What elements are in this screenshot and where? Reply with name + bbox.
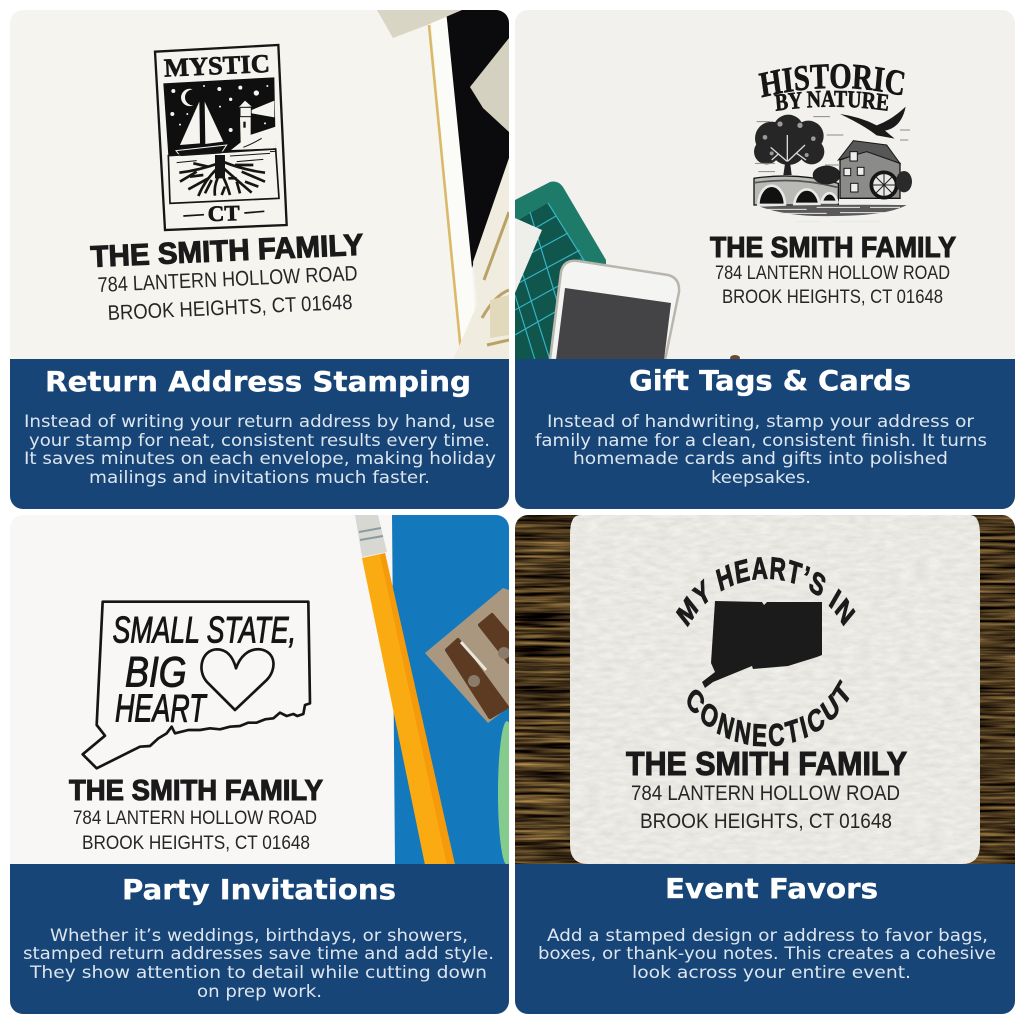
shrub <box>896 171 912 192</box>
city: BROOK HEIGHTS, CT 01648 <box>107 291 353 325</box>
city: BROOK HEIGHTS, CT 01648 <box>640 810 892 833</box>
caption panel <box>515 359 1015 509</box>
emblem word: CT: CT <box>207 200 240 226</box>
stone bridge <box>754 176 838 205</box>
body text: mailings and invitations much faster. <box>89 468 430 488</box>
body text <box>24 412 496 488</box>
heading: Event Favors <box>665 872 878 905</box>
photo: paper coaster on wood <box>515 515 1015 865</box>
family name: THE SMITH FAMILY <box>69 775 323 807</box>
body text: look across your entire event. <box>632 963 911 983</box>
Connecticut outline <box>83 602 310 768</box>
arched text: Connecticut: CONNECTICUT <box>687 679 850 747</box>
body text: keepsakes. <box>711 468 811 488</box>
eagle <box>840 107 906 139</box>
street: 784 LANTERN HOLLOW ROAD <box>715 263 950 284</box>
stamp: address block <box>710 232 956 308</box>
panel: gift tags and cards <box>515 10 1015 509</box>
body text: Add a stamped design or address to favor bags, <box>547 926 988 946</box>
body text <box>23 926 494 1002</box>
stamp: Mystic CT emblem <box>155 45 287 230</box>
caption panel <box>10 359 509 509</box>
bush <box>813 166 841 184</box>
night sky scene <box>163 77 276 157</box>
family name: THE SMITH FAMILY <box>710 232 956 264</box>
lettering: Big: BIG <box>125 649 187 697</box>
city: BROOK HEIGHTS, CT 01648 <box>722 287 943 308</box>
body text: Instead of writing your return address by hand, use <box>24 412 495 432</box>
Connecticut silhouette <box>702 601 822 688</box>
body text: stamped return addresses save time and add style. <box>23 944 494 964</box>
stamp: My Heart's in Connecticut emblem <box>676 556 856 747</box>
photo: paper, pencil and sharpener <box>10 515 516 865</box>
stamp: Small State, Big Heart emblem <box>83 602 310 768</box>
panel: party invitations <box>10 515 516 1014</box>
photo: envelope and ribbon <box>10 10 509 360</box>
water mill <box>838 141 900 198</box>
body text: Instead of handwriting, stamp your address or <box>547 412 974 432</box>
lettering: Small State: SMALL STATE, <box>113 609 296 651</box>
city: BROOK HEIGHTS, CT 01648 <box>82 833 310 854</box>
emblem word: Mystic: MYSTIC <box>163 49 270 83</box>
body text: on prep work. <box>197 982 322 1002</box>
family name: THE SMITH FAMILY <box>626 745 907 782</box>
body text <box>535 412 987 488</box>
body text: homemade cards and gifts into polished <box>573 449 948 469</box>
street: 784 LANTERN HOLLOW ROAD <box>631 782 900 805</box>
heading: Party Invitations <box>122 873 396 906</box>
water box with roots <box>168 149 279 203</box>
stamp: address block <box>626 745 907 833</box>
heart <box>201 649 273 710</box>
tree <box>754 115 824 175</box>
caption panel <box>10 864 509 1014</box>
panel: event favors <box>515 515 1015 1014</box>
river <box>760 205 907 216</box>
heading: Gift Tags & Cards <box>629 364 911 397</box>
street: 784 LANTERN HOLLOW ROAD <box>97 262 358 297</box>
body text: boxes, or thank-you notes. This creates a cohesive <box>538 944 996 964</box>
emblem word: Historic: HISTORIC <box>758 64 905 98</box>
body text: They show attention to detail while cutting down <box>29 963 487 983</box>
stamp: address block <box>90 229 364 325</box>
body text: your stamp for neat, consistent results every time. <box>29 431 490 451</box>
body text: family name for a clean, consistent finish. It turns <box>535 431 987 451</box>
arched text: My Heart's In: MY HEART’S IN <box>676 556 856 628</box>
photo: desk with cutting mat and phone <box>515 10 1015 361</box>
body text: It saves minutes on each envelope, making holiday <box>24 449 496 469</box>
stamp: Historic by Nature emblem <box>753 64 912 222</box>
body text: Whether it’s weddings, birthdays, or showers, <box>50 926 468 946</box>
stamp: address block <box>69 775 323 854</box>
emblem frame <box>155 45 287 230</box>
heading: Return Address Stamping <box>45 365 471 398</box>
lettering: Heart: HEART <box>115 688 207 731</box>
body text <box>538 926 996 983</box>
caption panel <box>515 864 1015 1014</box>
panel: return address stamping <box>10 10 509 509</box>
emblem words: By Nature: BY NATURE <box>774 90 888 112</box>
street: 784 LANTERN HOLLOW ROAD <box>73 808 317 829</box>
family name: THE SMITH FAMILY <box>90 229 364 274</box>
water wheel <box>871 172 897 198</box>
